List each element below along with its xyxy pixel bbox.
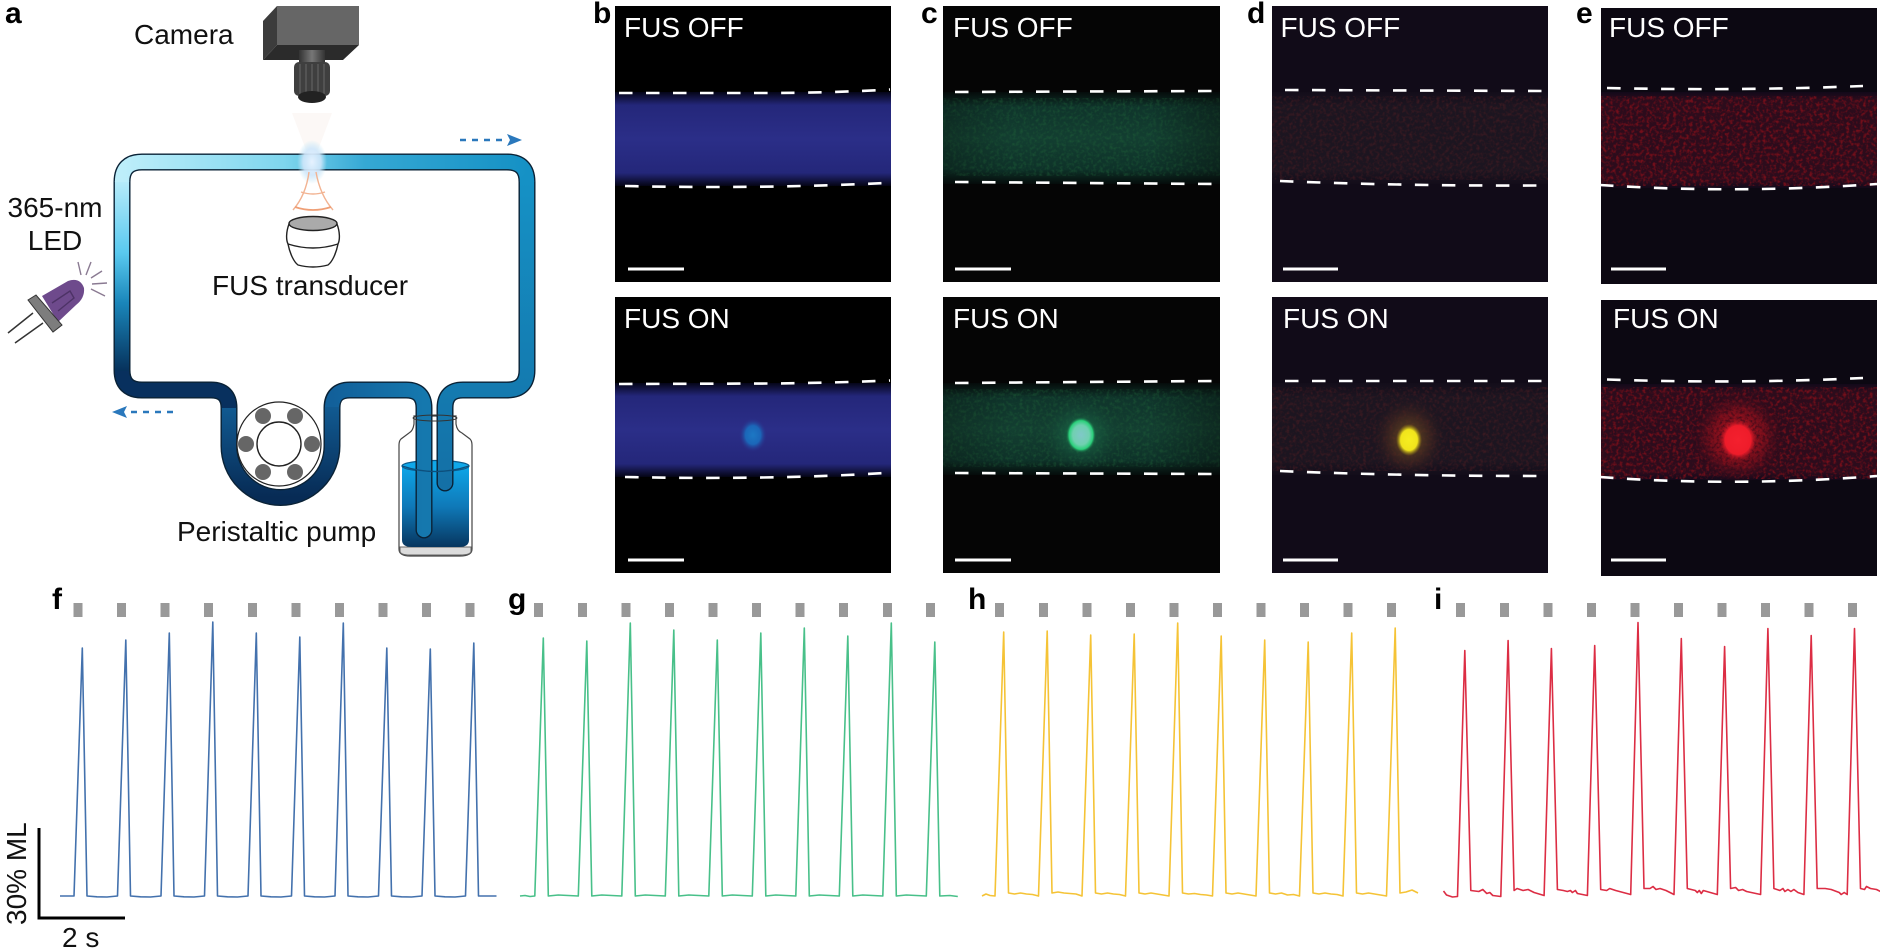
camera label: Camera [134, 19, 234, 50]
image: d FUS OFF: FUS OFF [1280, 12, 1400, 43]
image: c FUS ON: FUS ON [953, 303, 1059, 334]
image: c FUS OFF [943, 6, 1220, 282]
icon: camera [263, 6, 359, 103]
icon: FUS transducer [287, 216, 339, 267]
label g: g [508, 583, 526, 616]
image: c FUS ON [943, 297, 1220, 573]
bottle neck rim over tubes [413, 415, 457, 421]
label h: h [968, 583, 986, 616]
chart f: blue intensity trace [1, 583, 496, 950]
chart h: yellow intensity trace [968, 583, 1418, 896]
panel c: green emission images [921, 0, 1220, 573]
FUS pulse markers i [1456, 603, 1857, 617]
LED label: 365-nm [8, 192, 102, 223]
image: b FUS ON: FUS ON [624, 303, 730, 334]
icon: reservoir bottle [399, 416, 472, 556]
FUS pulse markers h [995, 603, 1396, 617]
light cone above tube [292, 113, 332, 150]
image: e FUS ON: FUS ON [1613, 303, 1719, 334]
LED label: LED [28, 225, 82, 256]
FUS transducer label: FUS transducer [212, 270, 408, 301]
ultrasound beam [293, 172, 333, 210]
image: e FUS OFF [1600, 8, 1877, 284]
tubing loop [122, 162, 527, 530]
liquid surface over tubes [402, 466, 469, 472]
trace h [982, 623, 1418, 896]
image: b FUS OFF [615, 6, 891, 282]
panel d: yellow emission images [1247, 0, 1548, 573]
FUS pulse markers g [534, 603, 935, 617]
label i: i [1434, 583, 1442, 616]
trace g [520, 623, 958, 896]
image: d FUS ON: FUS ON [1283, 303, 1389, 334]
icon: peristaltic pump [237, 402, 321, 486]
panel e: red emission images [1576, 0, 1877, 576]
trace f [60, 622, 496, 897]
chart i: red intensity trace [1434, 583, 1880, 897]
focal glow on tube [297, 140, 327, 184]
chart g: green intensity trace [508, 583, 958, 896]
image: c FUS OFF: FUS OFF [953, 12, 1073, 43]
icon: LED [8, 262, 107, 343]
pump label: Peristaltic pump [177, 516, 376, 547]
label f: f [52, 583, 63, 616]
FUS pulse markers f [74, 603, 474, 617]
image: b FUS ON [615, 297, 891, 573]
image: e FUS ON [1600, 300, 1877, 576]
arrow: top flow direction [460, 134, 522, 146]
image: d FUS OFF [1272, 6, 1548, 282]
panel b: blue emission images [593, 0, 891, 573]
trace i [1444, 622, 1880, 897]
panel a: flow-loop schematic [5, 0, 527, 556]
image: e FUS OFF: FUS OFF [1609, 12, 1729, 43]
scale bar [39, 828, 125, 918]
image: d FUS ON [1272, 297, 1548, 573]
scale label 30% ML: 30% ML [1, 822, 32, 925]
arrow: bottom flow direction [112, 406, 173, 418]
image: b FUS OFF: FUS OFF [624, 12, 744, 43]
